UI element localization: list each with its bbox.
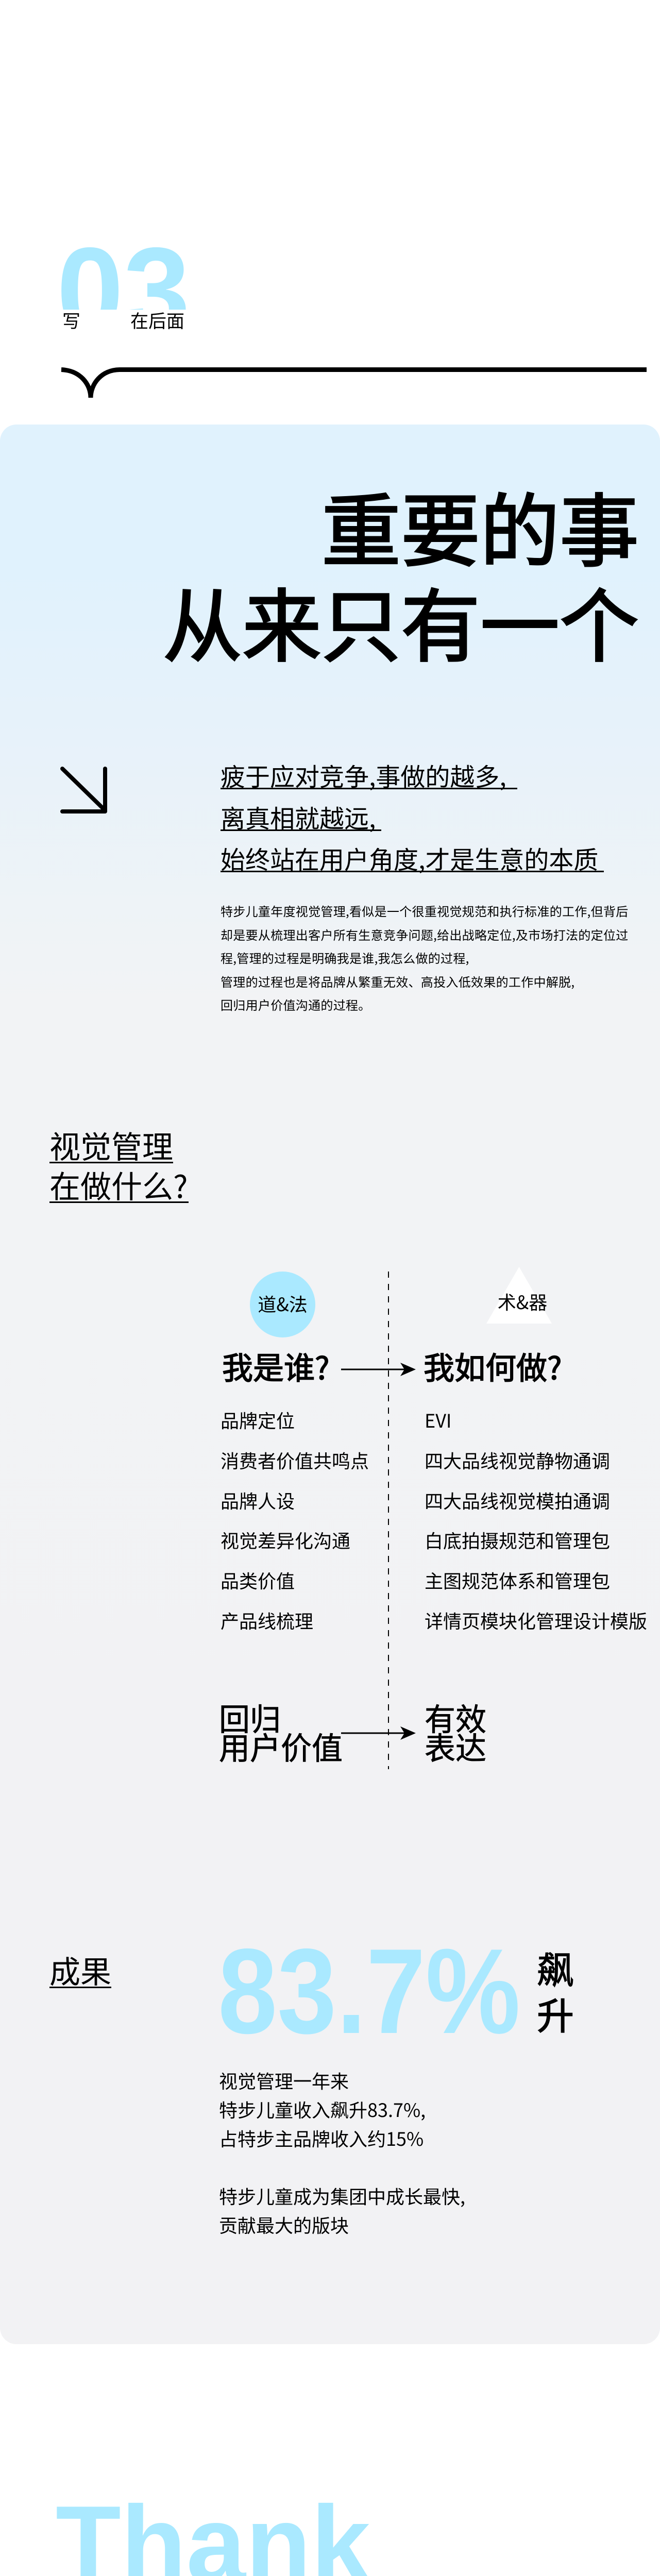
body paragraph: 管理的过程也是将品牌从繁重无效、高投入低效果的工作中解脱, [221,972,574,990]
soaring label: 升 [537,1986,574,2040]
right conclusion: 表达 [425,1724,486,1769]
subheading [221,757,604,876]
right list: 详情页模块化管理设计模版 [425,1607,647,1634]
left list: 品牌定位 [221,1406,295,1433]
body paragraph: 回归用户价值沟通的过程。 [221,995,371,1013]
body paragraph: 特步儿童年度视觉管理,看似是一个很重视觉规范和执行标准的工作,但背后 [221,902,629,920]
arrow: value to expression [340,1724,417,1742]
right list: EVI [425,1406,451,1433]
left list: 品类价值 [221,1567,295,1594]
left conclusion: 用户价值 [219,1724,343,1769]
results text: 视觉管理一年来 [219,2067,349,2094]
subheading: 始终站在用户角度,才是生意的本质 [221,840,598,876]
left list: 品牌人设 [221,1487,295,1514]
right list: 白底拍摄规范和管理包 [425,1527,610,1553]
left list: 消费者价值共鸣点 [221,1447,369,1473]
heading: results: 成果 [49,1947,111,1992]
left list: 产品线梳理 [221,1607,313,1634]
right list [425,1400,651,1641]
icon: down-right arrow [60,767,107,814]
badge: circle dao and fa: 道&法 [258,1290,308,1317]
subheading: 疲于应对竞争,事做的越多, [221,757,506,793]
panel: main content [0,425,660,2344]
arrow: who to how [340,1360,417,1379]
right heading: 我如何做? [424,1344,562,1388]
right list: 四大品线视觉静物通调 [425,1447,610,1473]
results text [219,2066,477,2239]
left conclusion [219,1703,343,1761]
bracket divider top [61,367,647,398]
right list: 主图规范体系和管理包 [425,1567,610,1594]
results text: 特步儿童收入飙升83.7%, [219,2096,426,2123]
title [163,468,639,678]
results text: 贡献最大的版块 [219,2211,349,2238]
dashed divider [388,1272,389,1769]
left heading: 我是谁? [222,1344,329,1388]
badge: circle dao and fa [250,1272,315,1337]
right conclusion [425,1703,489,1761]
results text: 占特步主品牌收入约15% [219,2125,424,2151]
left list: 视觉差异化沟通 [221,1527,350,1553]
right conclusion: 有效 [425,1695,486,1740]
badge: triangle shu and qi: 术&器 [498,1288,547,1315]
body paragraph [221,902,629,1013]
results text: 特步儿童成为集团中成长最快, [219,2182,465,2209]
body paragraph: 却是要从梳理出客户所有生意竞争问题,给出战略定位,及市场打法的定位过 [221,925,629,943]
left conclusion: 回归 [219,1695,281,1740]
body paragraph: 程,管理的过程是明确我是谁,我怎么做的过程, [221,948,469,967]
section caption: 写 在后面 [62,307,184,333]
heading: what visual management does [49,1123,189,1207]
right list: 四大品线视觉模拍通调 [425,1487,610,1514]
soaring label: 飙 [537,1940,574,1994]
badge: triangle shu and qi [486,1267,552,1324]
title: 从来只有一个 [163,563,639,678]
soaring label [537,1944,575,2036]
left list [221,1400,375,1641]
heading: what visual management does: 视觉管理 [49,1123,173,1167]
subheading: 离真相就越远, [221,799,376,835]
title: 重要的事 [321,468,639,583]
heading: what visual management does: 在做什么? [49,1162,188,1207]
